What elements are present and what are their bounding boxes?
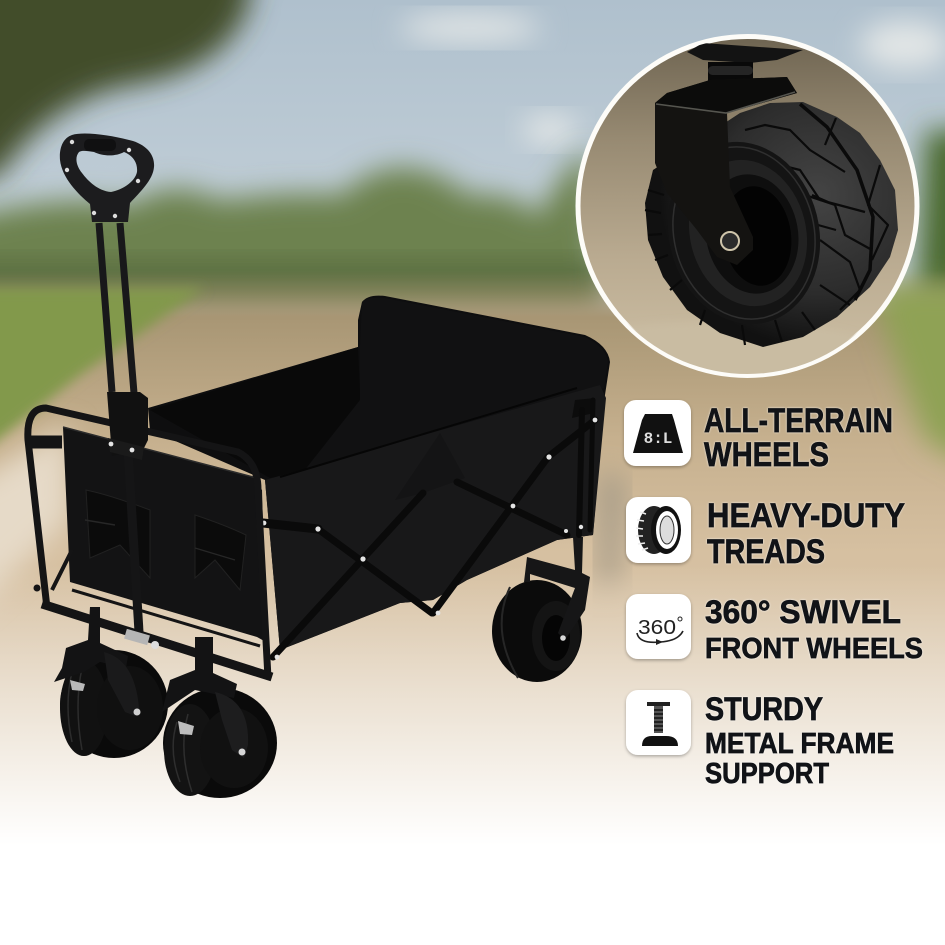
front wheel right xyxy=(162,637,277,798)
rear wheel and caster xyxy=(492,537,590,682)
wheel tire xyxy=(645,102,898,347)
feature 3: 360 swivel front wheels: 360° SWIVEL xyxy=(705,594,901,630)
feature 2: heavy-duty treads: HEAVY-DUTY xyxy=(707,497,905,535)
feature 4: sturdy metal frame support xyxy=(626,690,894,790)
caster mount xyxy=(687,43,803,63)
feature 4: sturdy metal frame support: SUPPORT xyxy=(705,758,829,790)
wagon interior and back panel xyxy=(148,296,610,650)
swivel fork xyxy=(655,77,797,265)
icon: tire xyxy=(626,497,691,563)
telescoping handle xyxy=(60,134,154,632)
feature 4: sturdy metal frame support: METAL FRAME xyxy=(705,728,894,760)
front wheel left xyxy=(54,607,168,758)
feature 4: sturdy metal frame support: STURDY xyxy=(705,691,823,727)
feature 2: heavy-duty treads xyxy=(626,497,905,571)
feature 1: all-terrain wheels: ALL-TERRAIN xyxy=(704,402,893,440)
wheel rim xyxy=(684,142,820,318)
wagon xyxy=(28,134,610,798)
feature 1: all-terrain wheels: WHEELS xyxy=(704,436,829,474)
side X-frame struts xyxy=(262,400,597,659)
front metal frame xyxy=(28,408,272,678)
icon: 360 rotation xyxy=(626,594,691,659)
callout: wheel close-up lens xyxy=(560,34,920,382)
latch on lower frame xyxy=(124,629,159,649)
side panel fabric xyxy=(265,385,606,650)
icon: weight xyxy=(624,400,691,466)
feature 1: all-terrain wheels xyxy=(624,400,893,474)
icon: spring support xyxy=(626,690,691,755)
front panel fabric with pockets xyxy=(63,427,266,642)
feature 3: 360 swivel front wheels xyxy=(626,594,923,665)
feature 2: heavy-duty treads: TREADS xyxy=(707,533,825,571)
icon: weight: 8:L xyxy=(644,430,672,448)
feature list xyxy=(624,400,923,790)
feature 3: 360 swivel front wheels: FRONT WHEELS xyxy=(705,633,923,665)
icon: 360 rotation: 360 xyxy=(638,617,676,639)
